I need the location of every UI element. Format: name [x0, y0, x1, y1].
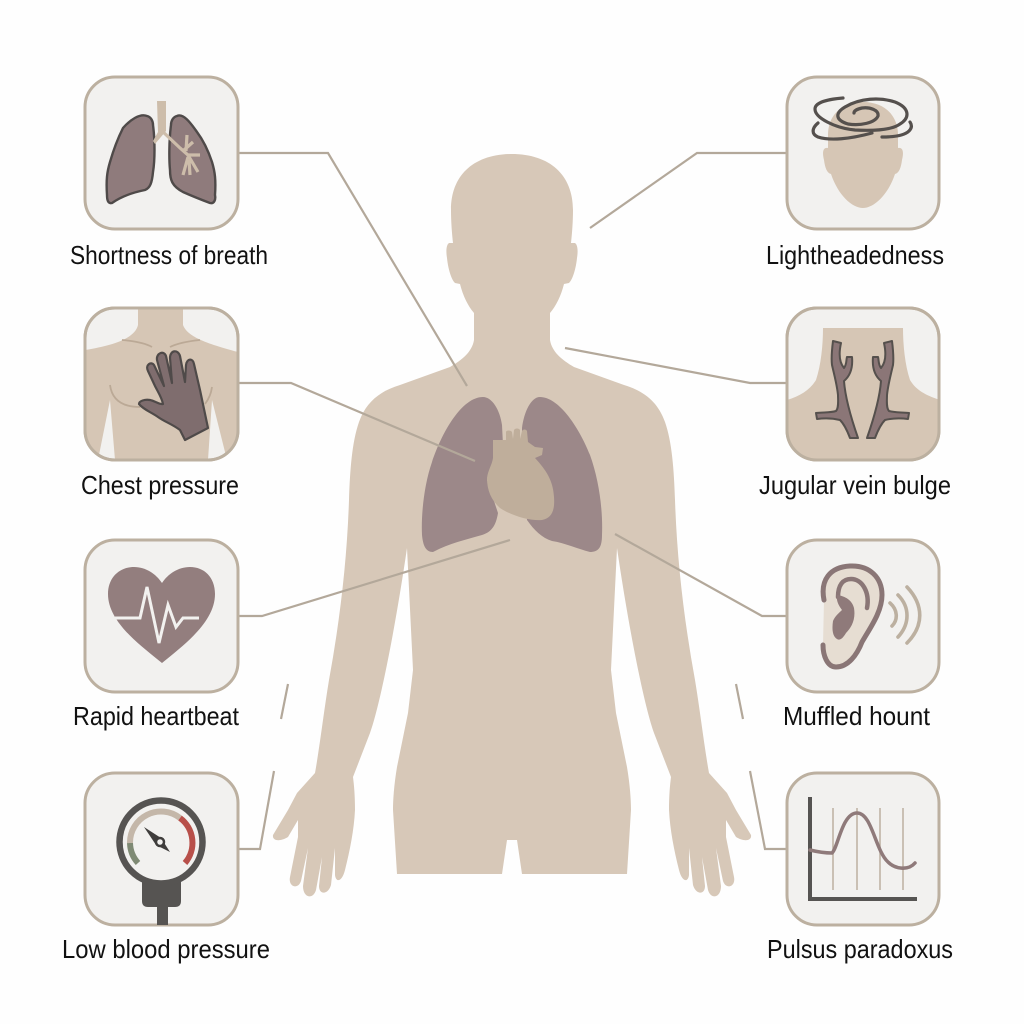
- label: jugular vein bulge: Jugular vein bulge: [759, 470, 951, 500]
- panel: rapid heartbeat: [73, 540, 240, 731]
- icon: pressure gauge: [120, 800, 202, 925]
- panel: lightheadedness: [766, 77, 944, 270]
- heart in figure: [487, 428, 554, 520]
- panel: jugular vein bulge: [759, 308, 951, 500]
- label: muffled hount: Muffled hount: [783, 701, 931, 731]
- icon: heart with ecg: [108, 567, 215, 663]
- panel: low blood pressure: [62, 773, 270, 964]
- panel: muffled sound: [783, 540, 939, 731]
- label: pulsus paradoxus: Pulsus paradoxus: [767, 934, 953, 964]
- connector lines: [238, 153, 786, 849]
- icon: ear with sound waves: [823, 566, 920, 667]
- label: shortness of breath: Shortness of breath: [70, 240, 268, 270]
- lungs in figure: [422, 397, 602, 552]
- icon: pulse chart: [810, 797, 917, 899]
- label: chest pressure: Chest pressure: [81, 470, 239, 500]
- label: lightheadedness: Lightheadedness: [766, 240, 944, 270]
- icon: hand on chest: [85, 308, 238, 460]
- icon: lungs: [107, 101, 215, 203]
- panel: pulsus paradoxus: [767, 773, 953, 964]
- body silhouette: [273, 154, 751, 896]
- label: low blood pressure: Low blood pressure: [62, 934, 270, 964]
- central body figure: [273, 154, 751, 896]
- icon: neck with bulging veins: [787, 328, 940, 460]
- panel: shortness of breath: [70, 77, 268, 270]
- icon: head with dizzy spiral: [813, 98, 911, 208]
- label: rapid heartbeat: Rapid heartbeat: [73, 701, 240, 731]
- panel: chest pressure: [81, 308, 239, 500]
